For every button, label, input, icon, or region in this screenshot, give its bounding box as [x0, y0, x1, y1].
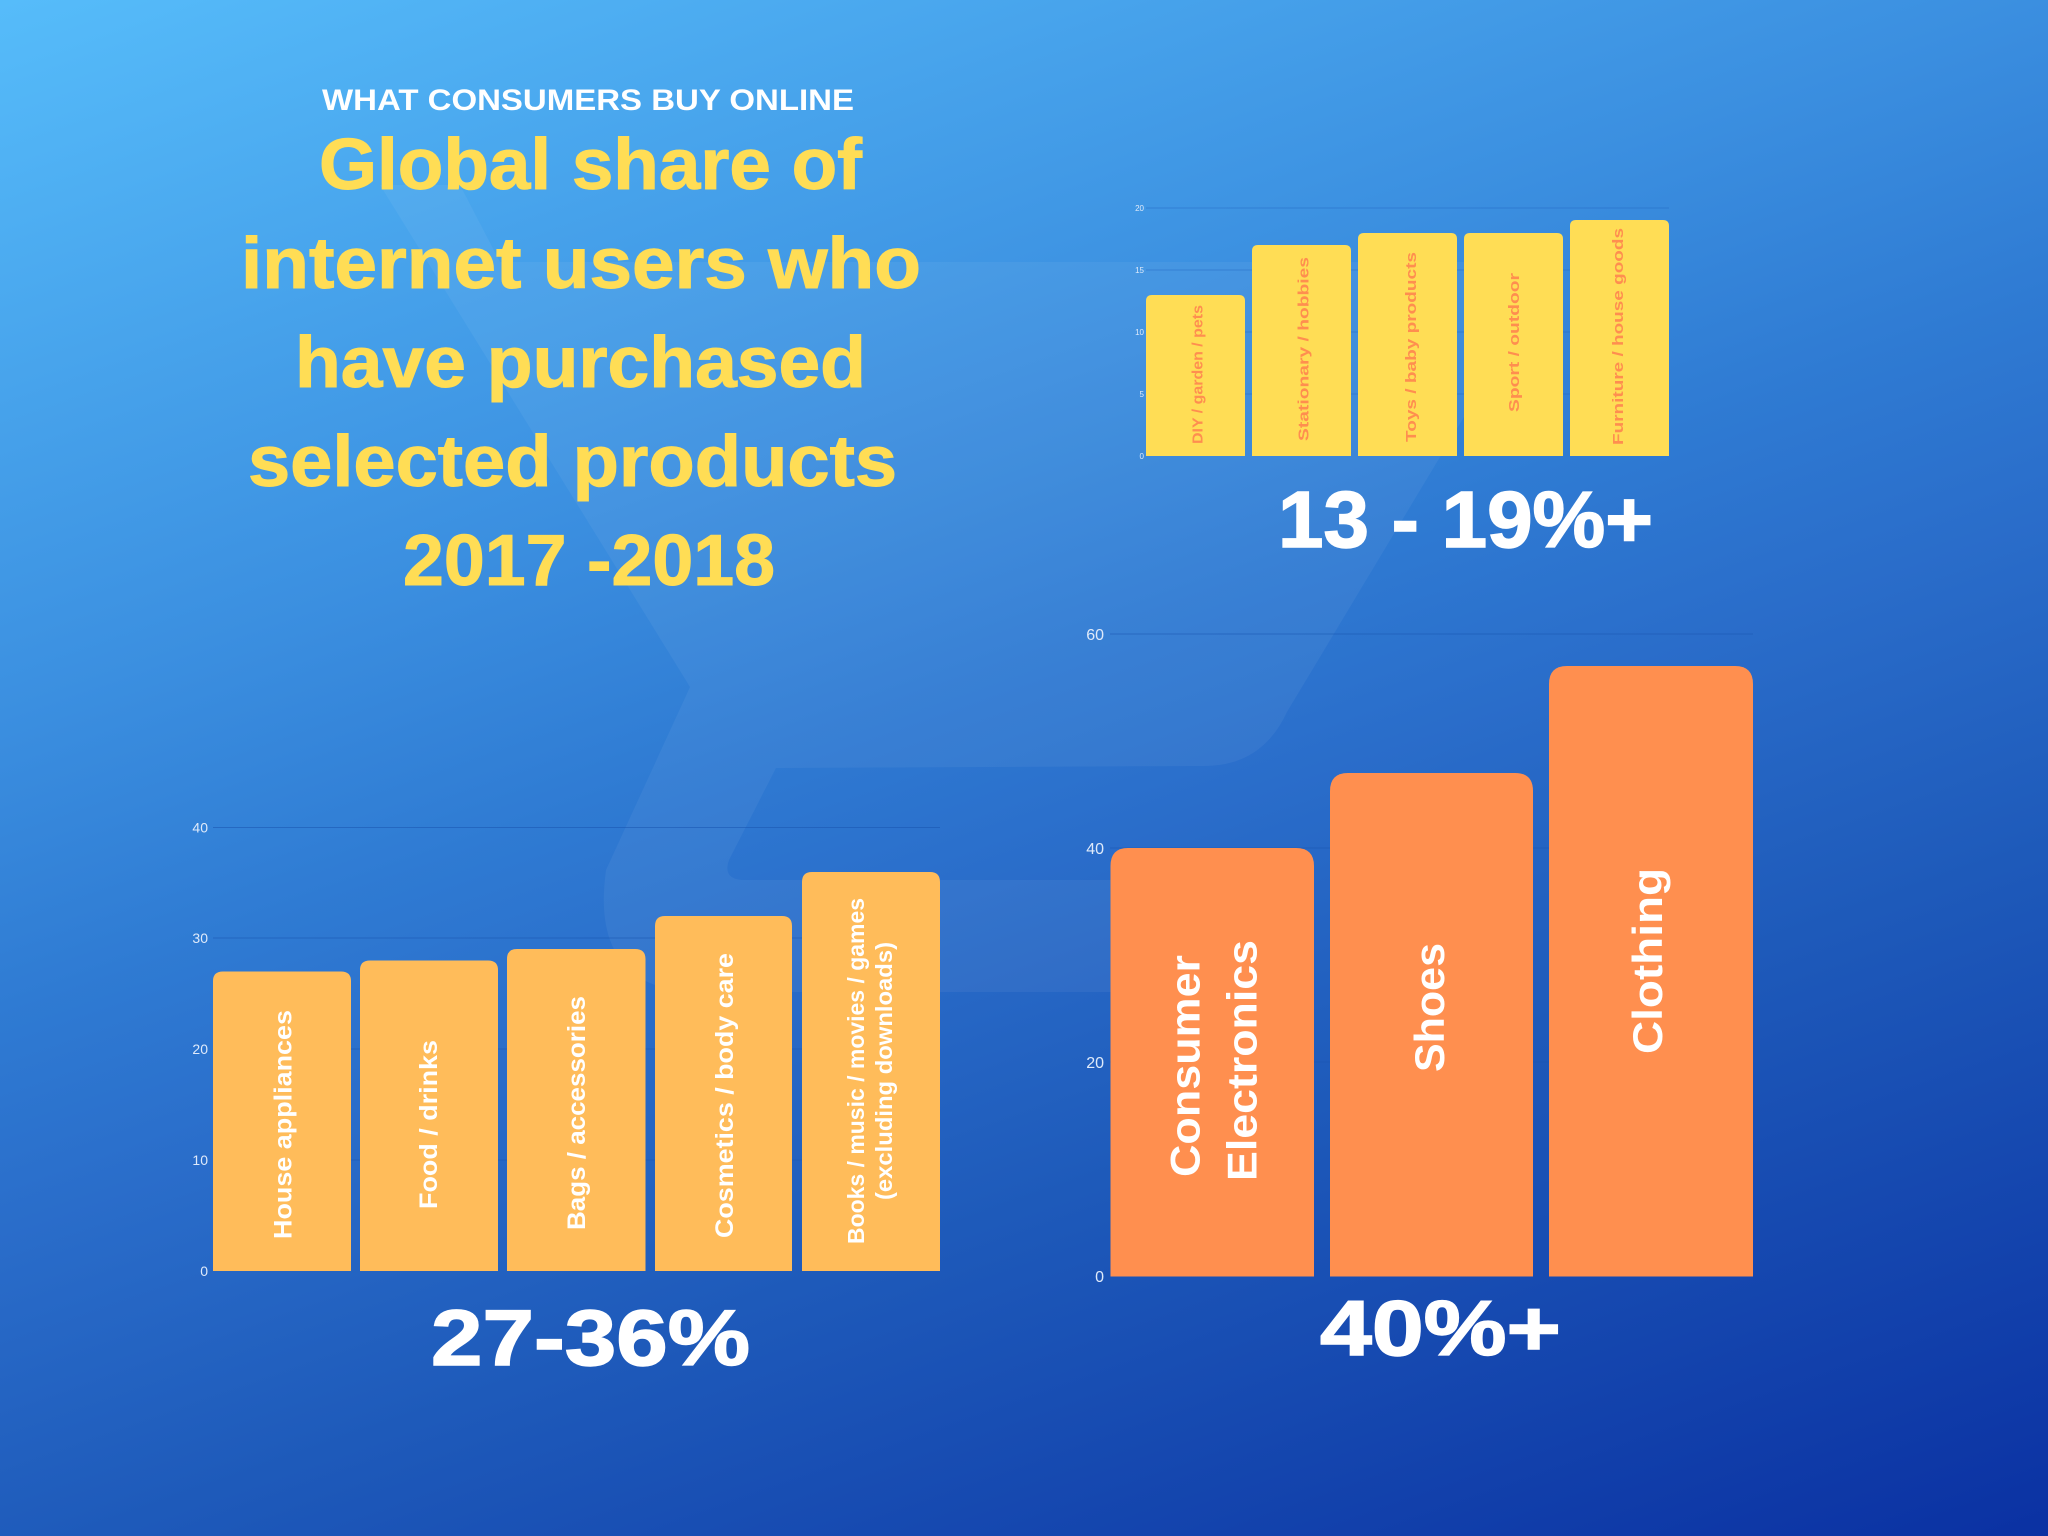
chart: 27-36% products: Bags / accessories — [563, 996, 591, 1230]
title: Global share of — [319, 125, 863, 205]
chart: 13-19% products: Stationary / hobbies — [1296, 257, 1312, 441]
chart: 13-19% products — [1135, 204, 1669, 461]
chart: 27-36% products — [192, 820, 940, 1279]
chart: 13-19% products: Furniture / house goods — [1610, 228, 1627, 445]
chart: 27-36% products: (excluding downloads) — [871, 942, 897, 1200]
chart: 27-36% products: 20 — [192, 1041, 208, 1057]
chart: 27-36% products: 10 — [192, 1152, 208, 1168]
subtitle: WHAT CONSUMERS BUY ONLINE — [322, 84, 854, 117]
figure: 27-36%: 27-36% — [431, 1293, 750, 1382]
icon: shopping cart watermark — [380, 185, 1547, 992]
chart: 13-19% products: Sport / outdoor — [1506, 273, 1523, 412]
title — [241, 125, 921, 601]
chart: 13-19% products: 20 — [1135, 204, 1145, 213]
chart: 13-19% products: 5 — [1140, 390, 1145, 399]
chart: 13-19% products: 0 — [1140, 452, 1145, 461]
chart: 13-19% products: 15 — [1135, 266, 1145, 275]
chart: 27-36% products: House appliances — [270, 1010, 298, 1239]
chart: 40%+ products: Shoes — [1406, 943, 1453, 1072]
chart: 40%+ products: 40 — [1086, 841, 1104, 858]
title: 2017 -2018 — [403, 521, 775, 601]
chart: 40%+ products: Electronics — [1218, 940, 1266, 1181]
chart: 13-19% products: Toys / baby products — [1403, 252, 1420, 442]
title: have purchased — [295, 323, 866, 403]
chart: 40%+ products: 0 — [1095, 1269, 1104, 1286]
title: internet users who — [241, 224, 921, 304]
chart: 27-36% products: 40 — [192, 820, 208, 836]
chart: 13-19% products: DIY / garden / pets — [1190, 305, 1206, 444]
chart: 40%+ products: 20 — [1086, 1055, 1104, 1072]
chart: 40%+ products: Consumer — [1162, 955, 1208, 1177]
figure: 40%+: 40%+ — [1320, 1284, 1561, 1372]
chart: 13-19% products: 10 — [1135, 328, 1145, 337]
figure: 13 - 19%+: 13 - 19%+ — [1278, 475, 1653, 564]
chart: 27-36% products: Books / music / movies / games — [843, 898, 869, 1244]
chart: 40%+ products: 60 — [1086, 627, 1104, 644]
chart: 40%+ products — [1086, 627, 1753, 1286]
chart: 27-36% products: 30 — [192, 930, 208, 946]
title: selected products — [248, 422, 897, 502]
chart: 27-36% products: Food / drinks — [415, 1040, 443, 1209]
chart: 27-36% products: Cosmetics / body care — [711, 953, 739, 1238]
chart: 27-36% products: 0 — [200, 1263, 208, 1279]
chart: 40%+ products: Clothing — [1624, 868, 1671, 1054]
